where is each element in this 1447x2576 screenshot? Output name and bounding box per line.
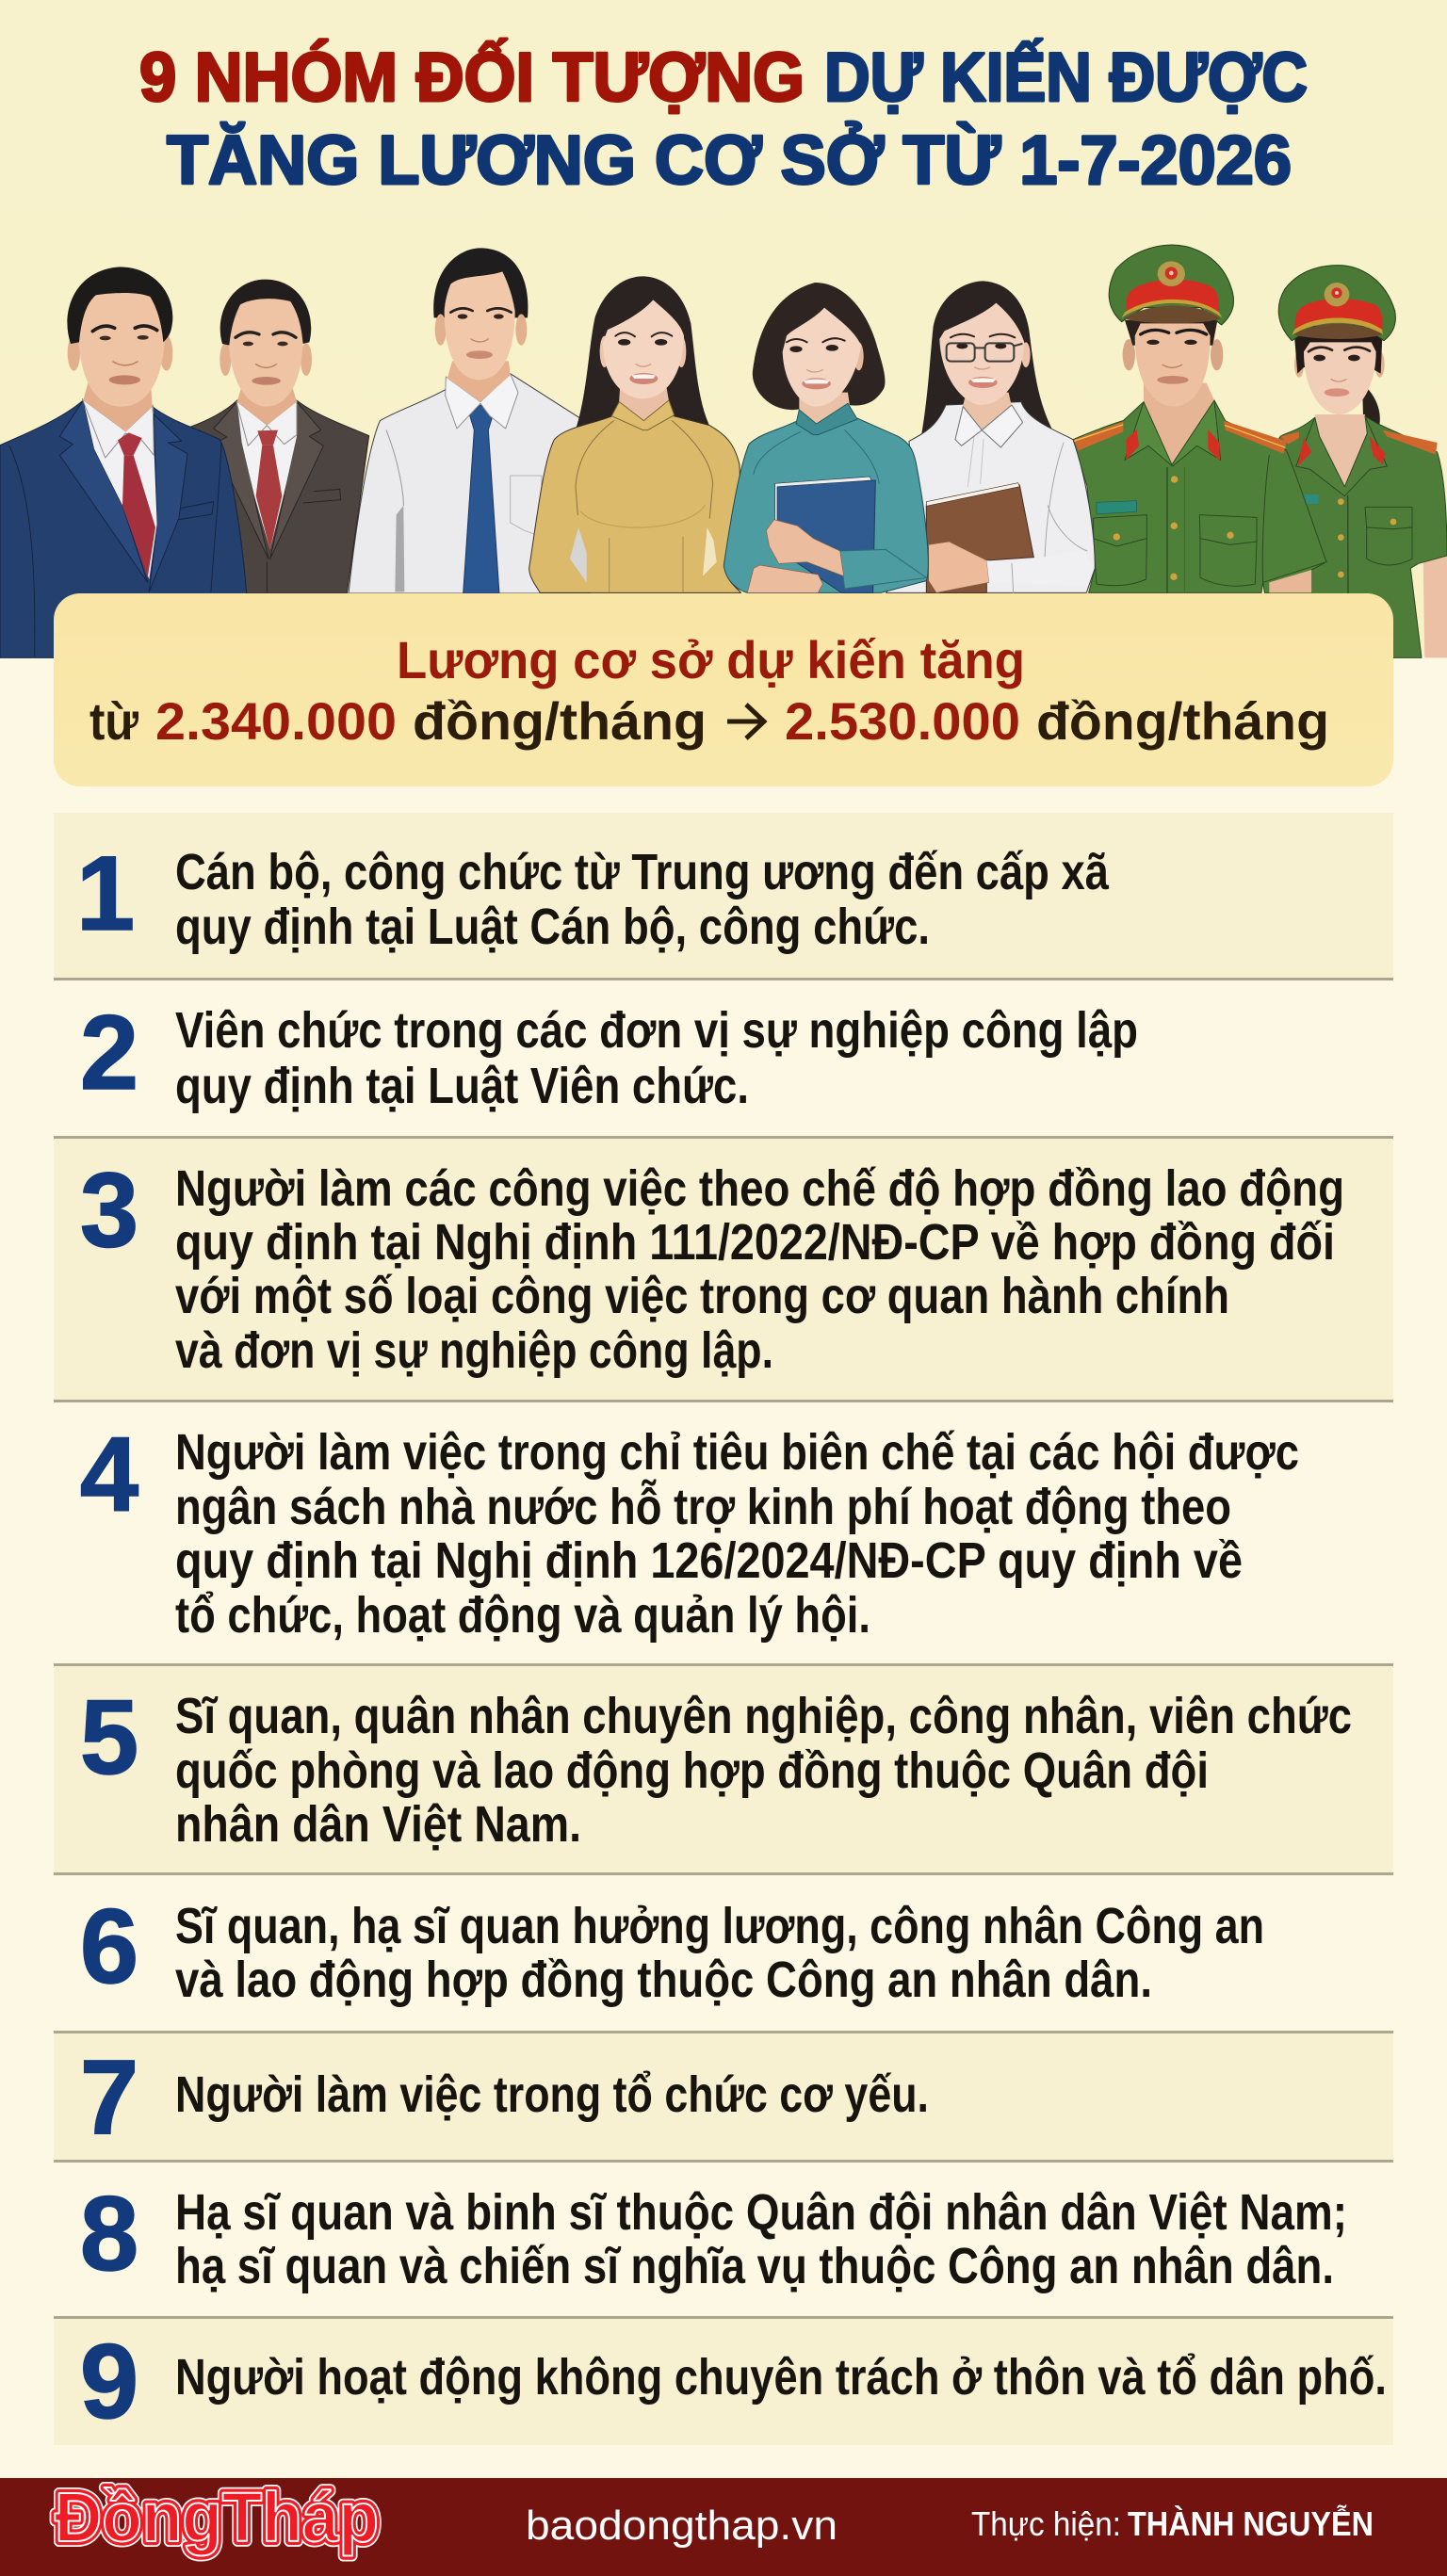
credit bbox=[971, 2503, 1374, 2543]
row 7 bbox=[54, 2031, 1393, 2161]
title bbox=[139, 39, 1308, 199]
callout salary change: đồng/tháng bbox=[413, 691, 707, 751]
callout salary change: 2.340.000 bbox=[155, 691, 397, 751]
row 3 text: với một số loại công việc trong cơ quan hành chính bbox=[175, 1268, 1229, 1324]
footer bar bbox=[0, 2478, 1447, 2576]
number 9: 9 bbox=[80, 2323, 138, 2440]
row 7 text: Người làm việc trong tổ chức cơ yếu. bbox=[175, 2066, 929, 2123]
credit: THÀNH NGUYỄN bbox=[1128, 2503, 1374, 2543]
number 6: 6 bbox=[80, 1887, 138, 2005]
number 8: 8 bbox=[80, 2175, 138, 2292]
callout salary change: 2.530.000 bbox=[785, 691, 1020, 751]
row 1 text: quy định tại Luật Cán bộ, công chức. bbox=[175, 899, 930, 955]
row 4 text: ngân sách nhà nước hỗ trợ kinh phí hoạt động theo bbox=[175, 1479, 1231, 1535]
person: woman in yellow ao dai bbox=[529, 276, 741, 592]
row 8 bbox=[54, 2160, 1393, 2294]
row 4 bbox=[54, 1400, 1393, 1644]
number 1: 1 bbox=[76, 834, 135, 952]
row 9 bbox=[54, 2316, 1393, 2445]
person: policeman bbox=[1073, 245, 1326, 592]
person: woman with glasses in white shirt bbox=[886, 281, 1095, 592]
row 3 text: và đơn vị sự nghiệp công lập. bbox=[175, 1322, 773, 1379]
number 7: 7 bbox=[80, 2038, 138, 2156]
number 4: 4 bbox=[80, 1416, 138, 1533]
credit: Thực hiện: bbox=[971, 2504, 1121, 2543]
number 5: 5 bbox=[80, 1678, 138, 1796]
row 5 text: nhân dân Việt Nam. bbox=[175, 1796, 581, 1853]
title: DỰ KIẾN ĐƯỢC bbox=[824, 40, 1308, 116]
row 3 text bbox=[175, 1160, 1344, 1379]
row 4 text: quy định tại Nghị định 126/2024/NĐ-CP quy định về bbox=[175, 1532, 1243, 1589]
website: baodongthap.vn bbox=[526, 2503, 837, 2549]
row 6 text: Sĩ quan, hạ sĩ quan hưởng lương, công nhân Công an bbox=[175, 1898, 1264, 1954]
zoomed group for women: origin shift to second crop bbox=[529, 276, 741, 592]
person: man in grey suit bbox=[190, 280, 369, 593]
logo: Đồng Tháp: ĐồngTháp bbox=[55, 2478, 379, 2556]
row 3 bbox=[54, 1136, 1393, 1401]
person: woman in teal ao dai holding a blue book bbox=[724, 283, 928, 592]
row 4 text: tổ chức, hoạt động và quản lý hội. bbox=[175, 1587, 870, 1644]
illustration: eight public-sector workers bbox=[0, 245, 1447, 657]
row 6 text bbox=[175, 1898, 1264, 2008]
logo: Đồng Tháp: ĐồngTháp bbox=[55, 2478, 379, 2556]
number 3: 3 bbox=[80, 1151, 138, 1269]
person: policewoman bbox=[1269, 266, 1447, 657]
logo: Đồng Tháp: ĐồngTháp bbox=[55, 2478, 379, 2556]
row 2 bbox=[54, 978, 1393, 1114]
person: man in white shirt and blue tie bbox=[349, 248, 591, 593]
row 8 text bbox=[175, 2184, 1347, 2294]
person: man in navy suit bbox=[0, 267, 247, 657]
title: TĂNG LƯƠNG CƠ SỞ TỪ 1-7-2026 bbox=[167, 122, 1292, 199]
callout heading: Lương cơ sở dự kiến tăng bbox=[397, 630, 1025, 689]
row 6 text: và lao động hợp đồng thuộc Công an nhân dân. bbox=[175, 1952, 1152, 2008]
salary callout card bbox=[54, 593, 1393, 786]
row 5 text: quốc phòng và lao động hợp đồng thuộc Quân đội bbox=[175, 1742, 1209, 1799]
row 5 text bbox=[175, 1688, 1352, 1853]
row 2 text: quy định tại Luật Viên chức. bbox=[175, 1058, 749, 1114]
row 1 text: Cán bộ, công chức từ Trung ương đến cấp xã bbox=[175, 844, 1110, 900]
callout salary change: đồng/tháng bbox=[1036, 691, 1329, 751]
callout salary change bbox=[89, 691, 1329, 751]
row 2 text bbox=[175, 1002, 1138, 1114]
row 2 text: Viên chức trong các đơn vị sự nghiệp công lập bbox=[175, 1002, 1138, 1059]
callout salary change: từ bbox=[89, 691, 138, 751]
number 2: 2 bbox=[80, 994, 138, 1111]
title: 9 NHÓM ĐỐI TƯỢNG bbox=[139, 39, 805, 116]
row 5 bbox=[54, 1663, 1393, 1873]
row 6 bbox=[54, 1872, 1393, 2008]
row 1 text bbox=[175, 844, 1110, 955]
row 1 bbox=[54, 813, 1393, 979]
row 4 text bbox=[175, 1424, 1299, 1644]
